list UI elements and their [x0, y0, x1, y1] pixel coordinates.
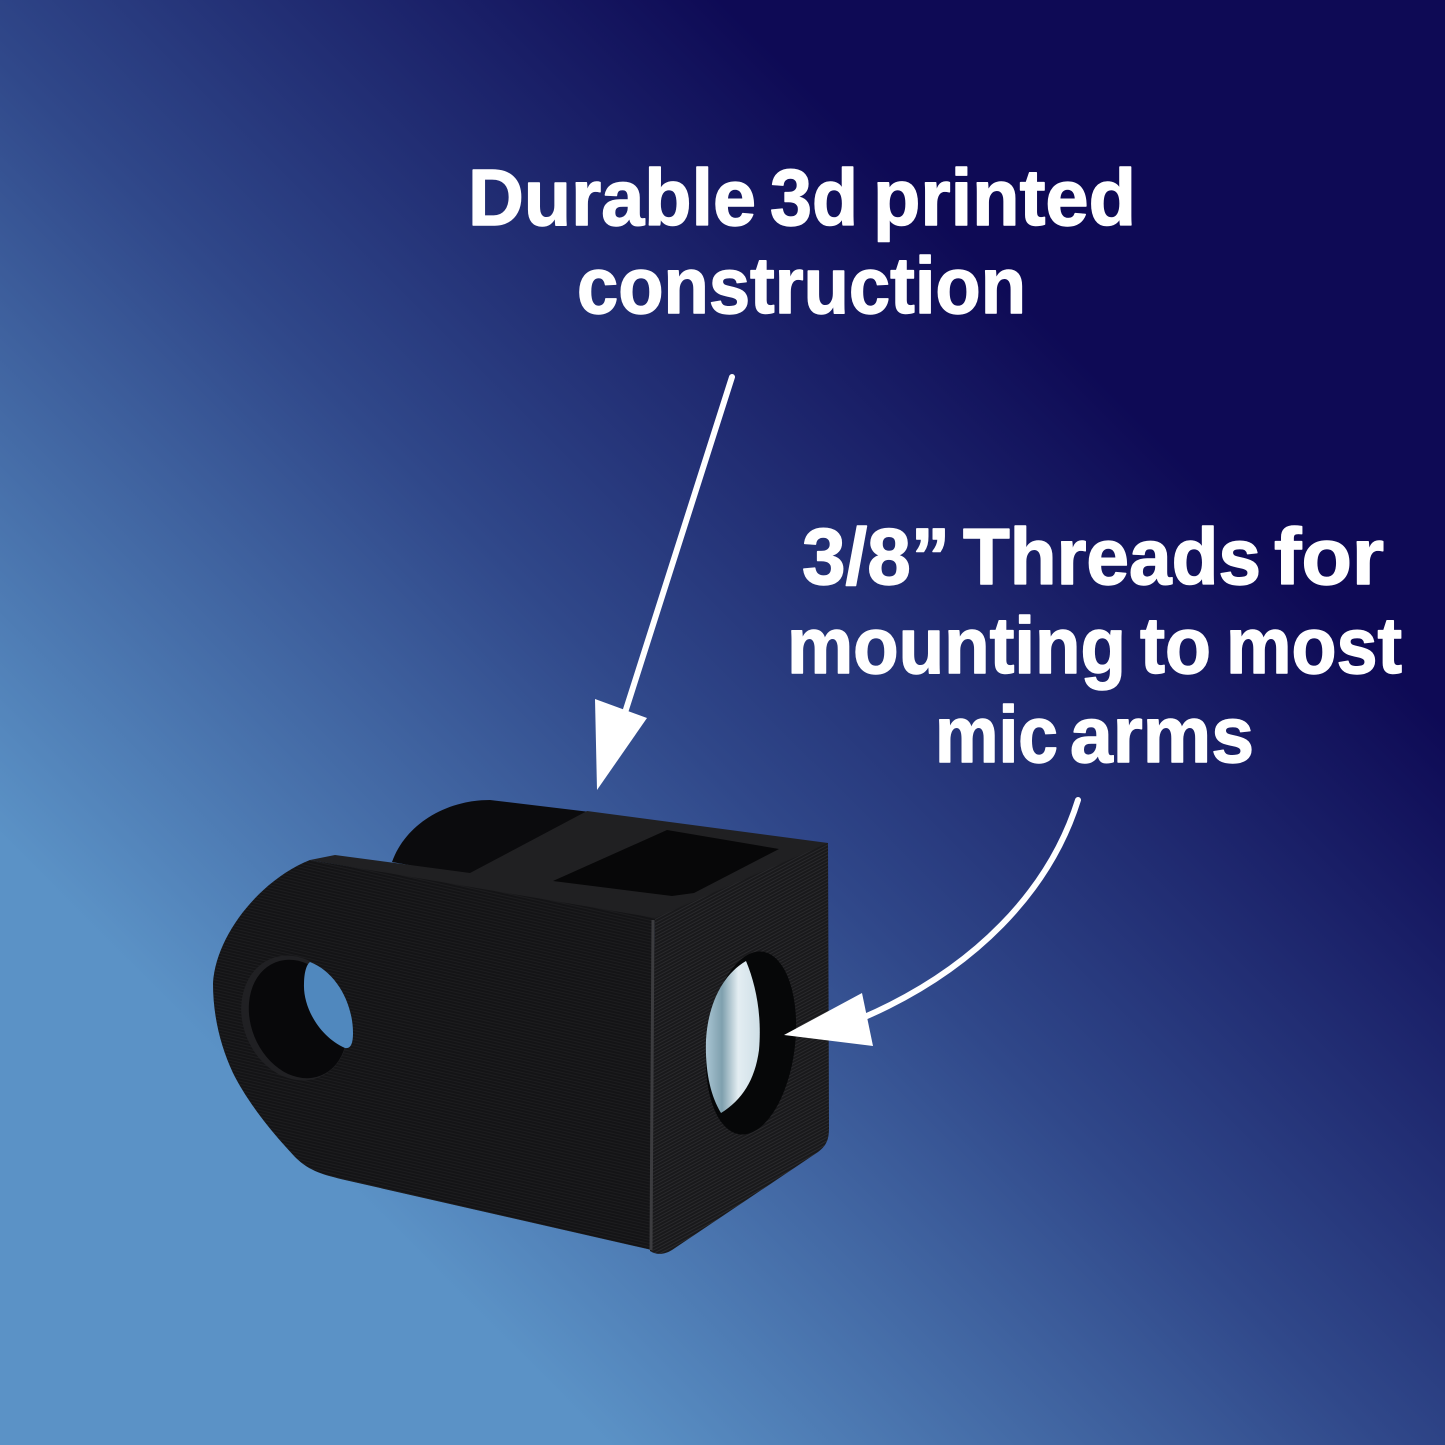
heading: threads for mounting: for	[1274, 512, 1384, 601]
arrow: to threaded insert	[784, 800, 1078, 1046]
heading: threads for mounting: most	[1226, 601, 1402, 690]
heading: threads for mounting: 3/8”	[802, 512, 950, 601]
back lobe of mount	[392, 800, 590, 876]
product: black 3D printed mount	[213, 800, 829, 1254]
left mounting hole	[232, 945, 364, 1093]
heading: threads for mounting: mounting	[787, 601, 1126, 690]
arrow: to top of mount	[595, 377, 732, 790]
heading: threads for mounting: Threads	[963, 512, 1261, 601]
left hole rim	[223, 939, 367, 1097]
top face	[310, 811, 828, 920]
heading: durable construction: 3d	[770, 153, 858, 242]
threaded insert hole	[696, 946, 806, 1140]
right face layer texture	[650, 843, 829, 1254]
right face	[650, 843, 829, 1254]
heading: threads for mounting: arms	[1070, 690, 1254, 779]
heading: durable construction: Durable	[468, 153, 756, 242]
metal threaded insert	[706, 961, 760, 1113]
heading: durable construction	[468, 153, 1136, 330]
heading: threads for mounting: mic	[935, 690, 1058, 779]
heading: durable construction: construction	[577, 241, 1026, 330]
heading: durable construction: printed	[873, 153, 1136, 242]
heading: threads for mounting	[787, 512, 1402, 779]
corner seam	[651, 920, 653, 1250]
rectangular top opening	[553, 830, 779, 896]
heading: threads for mounting: to	[1140, 601, 1211, 690]
front face layer texture	[213, 860, 655, 1250]
see-through hole	[304, 962, 353, 1048]
front face with round end	[213, 860, 655, 1250]
